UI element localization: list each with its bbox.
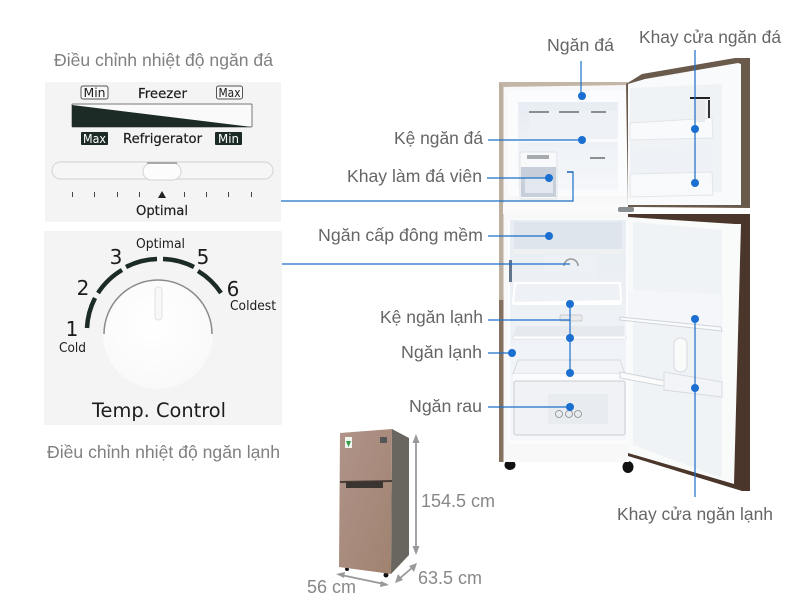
dimension: depth: 63.5 cm <box>418 568 482 588</box>
callout lines <box>281 50 695 497</box>
heading: freezer temperature control: Điều chỉnh nhiệt độ ngăn đá <box>54 50 273 70</box>
dial numbers: 6 <box>227 277 239 301</box>
side panel <box>391 429 409 574</box>
label: Refrigerator: Refrigerator <box>123 131 202 147</box>
label: Min solid: Min <box>218 132 239 146</box>
ice tray <box>520 152 557 199</box>
freezer cavity <box>508 91 628 196</box>
label: Temp. Control: Temp. Control <box>91 399 226 422</box>
heading: fridge temperature control: Điều chỉnh nhiệt độ ngăn lạnh <box>47 442 280 462</box>
dial label: Optimal: Optimal <box>136 236 185 252</box>
open refrigerator photo <box>499 58 750 491</box>
dial numbers: 2 <box>77 276 89 300</box>
cabinet <box>499 82 629 462</box>
dial label: Cold: Cold <box>59 340 86 356</box>
dimension arrows <box>336 434 420 587</box>
dimension: width: 56 cm <box>307 577 356 597</box>
dial label: Coldest: Coldest <box>230 298 276 314</box>
panel: freezer control <box>45 82 281 222</box>
label: Kệ ngăn đá: Kệ ngăn đá <box>394 128 483 148</box>
label: Khay cửa ngăn đá: Khay cửa ngăn đá <box>639 27 781 47</box>
label: Max solid: Max <box>83 132 106 146</box>
label: Optimal: Optimal <box>136 203 188 219</box>
gauge wedge <box>72 104 252 127</box>
callout dots <box>508 92 699 411</box>
feet <box>504 460 634 473</box>
label: Khay cửa ngăn lạnh: Khay cửa ngăn lạnh <box>617 504 773 524</box>
dial numbers <box>66 245 239 341</box>
dial numbers: 1 <box>66 317 78 341</box>
slider <box>52 162 273 180</box>
dial knob <box>103 279 213 389</box>
dimension: height: 154.5 cm <box>421 491 495 511</box>
label: Freezer: Freezer <box>138 86 187 102</box>
fridge door <box>620 214 750 491</box>
dial numbers: 3 <box>110 245 122 269</box>
label: Max outline: Max <box>218 86 240 100</box>
lever <box>567 171 573 173</box>
feet <box>345 567 388 578</box>
fridge shelves <box>513 283 626 339</box>
label: Khay làm đá viên: Khay làm đá viên <box>347 166 482 186</box>
dial arc <box>87 259 221 328</box>
label: Kệ ngăn lạnh: Kệ ngăn lạnh <box>380 307 483 327</box>
crisper drawer <box>513 360 625 435</box>
freezer door <box>618 58 750 212</box>
label: Min outline: Min <box>84 86 106 100</box>
label: Ngăn lạnh: Ngăn lạnh <box>401 342 482 362</box>
dial numbers: 5 <box>197 245 209 269</box>
front panel <box>339 429 392 574</box>
fridge cavity <box>508 219 628 444</box>
energy label <box>345 437 387 448</box>
slider ticks <box>72 191 252 198</box>
closed refrigerator thumbnail <box>339 429 409 578</box>
door gap and handle <box>340 480 392 488</box>
label: Ngăn rau: Ngăn rau <box>409 396 482 416</box>
label: Ngăn đá: Ngăn đá <box>547 35 614 55</box>
label: Ngăn cấp đông mềm: Ngăn cấp đông mềm <box>318 225 483 245</box>
panel: fridge control <box>44 231 282 425</box>
